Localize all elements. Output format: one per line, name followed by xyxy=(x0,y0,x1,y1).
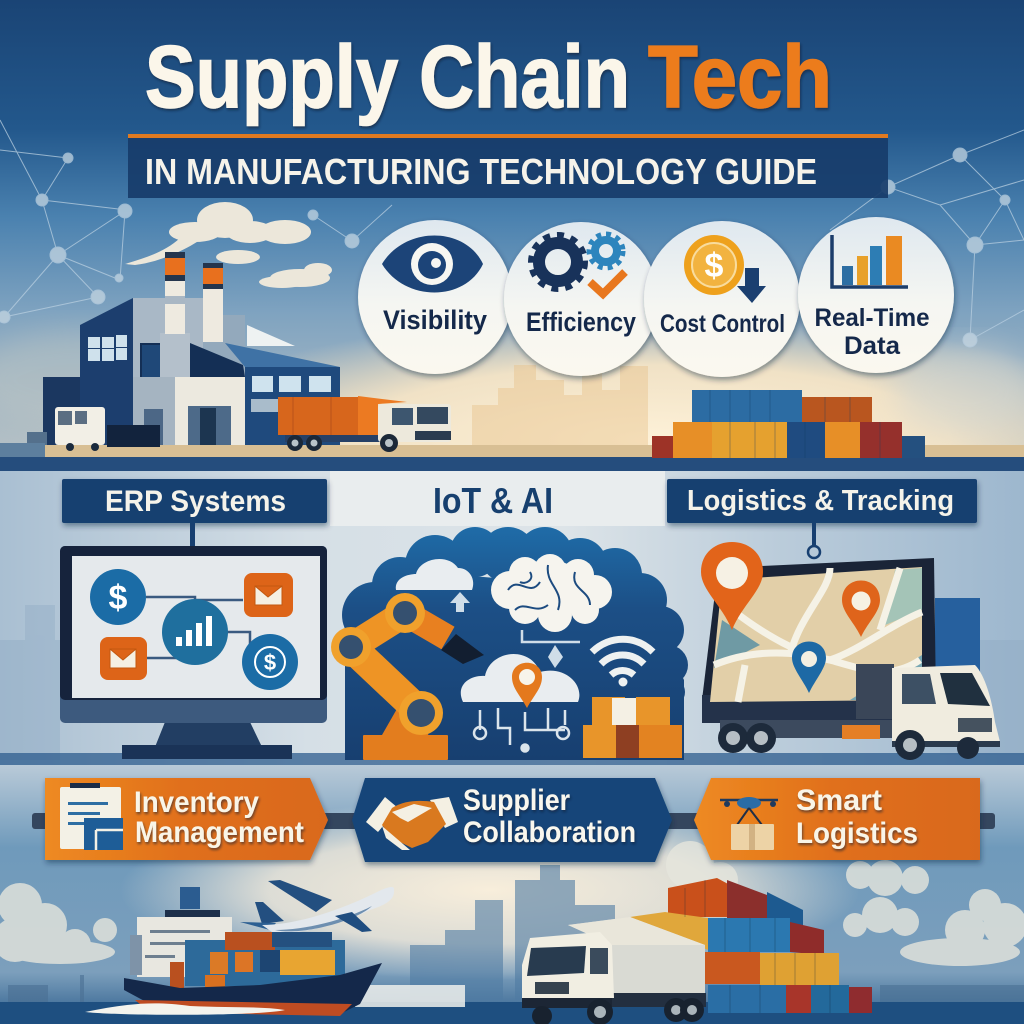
dark roof xyxy=(140,343,245,377)
banner: smart logistics xyxy=(694,778,980,860)
icon: envelope xyxy=(244,573,293,617)
subtitle banner xyxy=(128,138,888,198)
badge: efficiency: Efficiency xyxy=(526,307,636,337)
brain xyxy=(491,554,612,632)
up arrow xyxy=(450,592,470,612)
icon: eye xyxy=(382,236,483,292)
dark tower xyxy=(80,298,133,448)
badge: real-time data: Data xyxy=(844,332,901,360)
cardboard boxes xyxy=(583,697,682,758)
title: Supply Chain xyxy=(145,27,630,126)
icon: coin and down arrow: $ xyxy=(705,247,724,285)
map monitor and truck xyxy=(701,523,1000,760)
orange pin xyxy=(842,580,880,637)
icon: handshake xyxy=(366,797,458,850)
map screen xyxy=(710,567,922,702)
blue pin xyxy=(792,642,826,693)
banner: inventory management: Inventory xyxy=(134,786,259,819)
badge: real-time data xyxy=(798,217,954,373)
heading: IoT and AI: IoT & AI xyxy=(433,480,553,521)
left low block xyxy=(43,377,83,448)
icon: coin and down arrow xyxy=(684,235,766,303)
white block xyxy=(133,377,245,447)
circuit lines xyxy=(474,708,569,752)
badge: visibility xyxy=(358,220,512,374)
stacked containers bottom xyxy=(630,878,872,1013)
lower cloud xyxy=(461,654,579,702)
icon: gears and check xyxy=(531,234,625,294)
ERP monitor xyxy=(60,523,327,759)
banner: supplier collaboration: Collaboration xyxy=(463,816,636,849)
icon: clipboard xyxy=(60,783,123,850)
right building xyxy=(245,367,340,447)
icon: dollar ring xyxy=(242,634,298,690)
icon: dollar coin xyxy=(90,569,146,625)
network pattern right xyxy=(308,130,1024,347)
network pattern left xyxy=(0,120,132,323)
monitor frame xyxy=(702,558,936,722)
IoT and AI cloud xyxy=(331,527,688,760)
badge: cost control: Cost Control xyxy=(660,310,785,338)
shipping containers top xyxy=(652,390,925,458)
container stack xyxy=(170,932,345,988)
hull xyxy=(124,963,382,1014)
lower section background xyxy=(0,765,1024,1024)
heading: Logistics and Tracking xyxy=(667,479,977,523)
badge: visibility: Visibility xyxy=(383,305,487,335)
heading: ERP Systems xyxy=(62,479,327,523)
clouds near factory xyxy=(125,202,332,288)
banner: supplier collaboration: Supplier xyxy=(463,784,570,817)
truck xyxy=(718,664,1000,760)
banner: supplier collaboration xyxy=(352,778,672,862)
badge: real-time data: Real-Time xyxy=(814,304,930,332)
wifi icon xyxy=(592,639,653,686)
connector bar xyxy=(32,813,995,829)
title: Tech xyxy=(648,27,832,126)
icon: bar chart xyxy=(832,235,908,287)
icon: dollar ring: $ xyxy=(264,650,276,675)
white truck bottom xyxy=(522,917,706,1024)
heading: ERP Systems: ERP Systems xyxy=(105,485,286,518)
banner: inventory management xyxy=(45,778,328,860)
distant skyline xyxy=(472,365,648,445)
heading: Logistics and Tracking: Logistics & Tracking xyxy=(687,485,954,517)
ground strip xyxy=(0,443,1024,471)
subtitle banner: IN MANUFACTURING TECHNOLOGY GUIDE xyxy=(145,151,817,192)
white van xyxy=(55,407,160,451)
map pin xyxy=(512,663,542,708)
icon: chart circle xyxy=(162,599,228,665)
airplane xyxy=(240,880,394,933)
small cloud xyxy=(396,559,473,590)
robot arm xyxy=(331,593,484,760)
factory illustration xyxy=(27,252,340,448)
banner: smart logistics: Logistics xyxy=(796,817,918,850)
superstructure xyxy=(180,887,200,909)
cargo ship xyxy=(85,887,382,1016)
banner: inventory management: Management xyxy=(135,816,304,849)
badge: cost control xyxy=(644,221,800,377)
icon: drone with box xyxy=(720,797,778,850)
icon: envelope small xyxy=(100,637,147,680)
middle section background xyxy=(0,471,1024,770)
badge: efficiency xyxy=(504,222,658,376)
orange truck xyxy=(278,396,451,452)
chimneys xyxy=(160,333,190,377)
top section background xyxy=(0,0,1024,565)
icon: dollar coin: $ xyxy=(109,579,128,617)
banner: smart logistics: Smart xyxy=(796,784,882,817)
large orange pin xyxy=(701,542,763,630)
title rule xyxy=(128,134,888,138)
gray block xyxy=(133,298,203,378)
